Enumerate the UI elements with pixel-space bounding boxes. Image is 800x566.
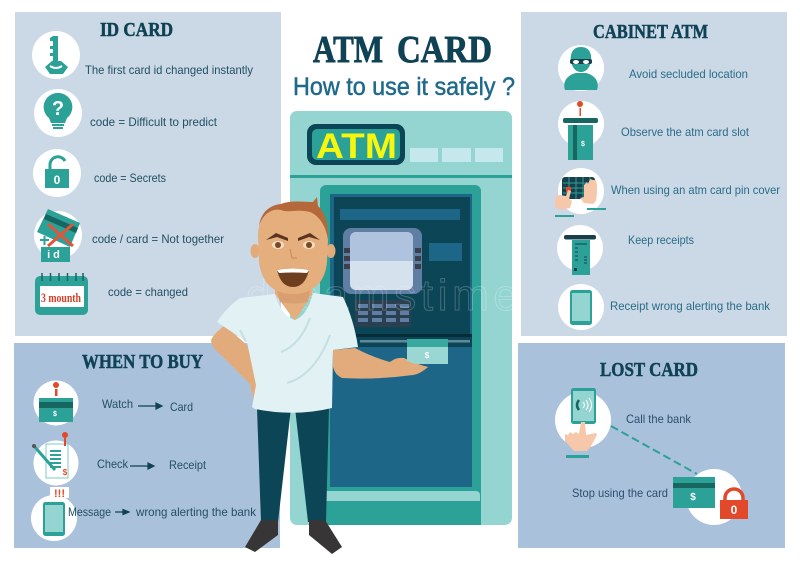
text: watch card: Watch bbox=[102, 397, 133, 411]
icon: key bbox=[32, 31, 80, 79]
ATM body frame bbox=[320, 185, 481, 525]
icon: watch card: $ bbox=[53, 411, 57, 418]
ATM sign bbox=[307, 124, 405, 166]
icon: check receipt: $ bbox=[63, 468, 68, 477]
heading: ID card: ID CARD bbox=[100, 19, 173, 41]
ATM keypad bbox=[355, 300, 411, 327]
text: first card id: The first card id changed instantly bbox=[85, 63, 253, 77]
shoes bbox=[245, 520, 342, 554]
text: call the bank: Call the bank bbox=[626, 412, 692, 426]
character: man presenting card bbox=[211, 197, 448, 554]
icon: card and lock: 0 bbox=[731, 503, 738, 517]
card in hand bbox=[407, 339, 448, 364]
icon: question bulb bbox=[34, 89, 82, 137]
icon: card and lock: $ bbox=[690, 492, 696, 503]
icon: check receipt bbox=[32, 432, 78, 486]
watermark: dreamstime bbox=[246, 271, 518, 320]
shirt bbox=[217, 293, 358, 413]
icon: phone bbox=[558, 284, 604, 330]
text: keep receipts: Keep receipts bbox=[628, 233, 694, 247]
text: check receipt bbox=[97, 457, 207, 472]
text: observe slot: Observe the atm card slot bbox=[621, 125, 750, 139]
text: not together: code / card = Not together bbox=[92, 232, 224, 246]
text: message: Message bbox=[68, 505, 111, 519]
legs bbox=[257, 408, 329, 522]
arrow bbox=[138, 403, 162, 409]
text: pin cover: When using an atm card pin cover bbox=[611, 183, 780, 197]
text: changed: code = changed bbox=[108, 285, 188, 299]
text: watch card bbox=[102, 397, 193, 414]
icon: card slot: $ bbox=[581, 141, 585, 148]
heading: cabinet ATM: CABINET ATM bbox=[593, 21, 708, 43]
text: watch card: Card bbox=[170, 400, 193, 414]
title: ATM CARD: CARD bbox=[397, 29, 492, 71]
icon: masked person bbox=[558, 45, 604, 91]
icon: card slot bbox=[558, 101, 604, 160]
arrow bbox=[115, 510, 129, 514]
panel: lost card bbox=[518, 343, 785, 548]
text: message bbox=[68, 505, 257, 519]
hair bbox=[259, 197, 328, 240]
title: ATM CARD bbox=[313, 29, 492, 71]
panel: cabinet ATM bbox=[521, 12, 787, 336]
heading: when to buy: WHEN TO BUY bbox=[82, 351, 203, 373]
icon: question bulb: ? bbox=[52, 98, 64, 120]
subtitle: How to use it safely ? bbox=[293, 73, 515, 101]
text: wrong alerting: Receipt wrong alerting the bank bbox=[610, 299, 771, 313]
ATM screen bbox=[343, 228, 422, 294]
text: message: wrong alerting the bank bbox=[135, 505, 257, 519]
icon: phone call bbox=[555, 388, 611, 458]
heading: lost card: LOST CARD bbox=[600, 359, 698, 381]
ATM machine bbox=[290, 111, 512, 525]
icon: calendar: 3 mounth bbox=[41, 290, 82, 305]
text: secrets: code = Secrets bbox=[94, 171, 166, 185]
text: stop using: Stop using the card bbox=[572, 486, 668, 500]
head bbox=[250, 197, 336, 294]
hand over card bbox=[390, 359, 428, 375]
text: check receipt: Check bbox=[97, 457, 129, 471]
panel: ID card bbox=[15, 12, 281, 336]
panel: when to buy bbox=[14, 343, 280, 548]
icon: watch card bbox=[34, 380, 78, 426]
card in hand: $ bbox=[425, 351, 430, 360]
text: avoid secluded location: Avoid secluded location bbox=[629, 67, 748, 81]
icon: phone alert: !!! bbox=[54, 488, 65, 500]
neck shadow bbox=[277, 290, 310, 304]
ATM sign: ATM bbox=[316, 127, 397, 166]
text: difficult to predict: code = Difficult to predict bbox=[90, 115, 218, 129]
neck bbox=[275, 280, 312, 321]
icon: calendar bbox=[35, 273, 88, 315]
mouth bbox=[277, 268, 309, 287]
icon: phone alert bbox=[31, 487, 77, 541]
eyebrows bbox=[266, 233, 320, 241]
title: ATM CARD: ATM bbox=[313, 29, 383, 71]
icon: open padlock: 0 bbox=[54, 173, 61, 187]
icon: card and id crossed bbox=[34, 209, 82, 262]
right arm bbox=[333, 348, 428, 379]
icon: keypad and hands bbox=[555, 168, 606, 217]
icon: card and id crossed: id bbox=[47, 249, 63, 261]
eyes bbox=[272, 241, 315, 249]
left arm bbox=[211, 326, 258, 402]
title block bbox=[293, 29, 515, 101]
dashed connector bbox=[611, 426, 697, 474]
icon: open padlock bbox=[33, 149, 81, 197]
text: check receipt: Receipt bbox=[169, 458, 207, 472]
icon: receipt bbox=[557, 225, 603, 275]
icon: card and lock bbox=[673, 469, 748, 525]
arrow bbox=[130, 463, 154, 469]
